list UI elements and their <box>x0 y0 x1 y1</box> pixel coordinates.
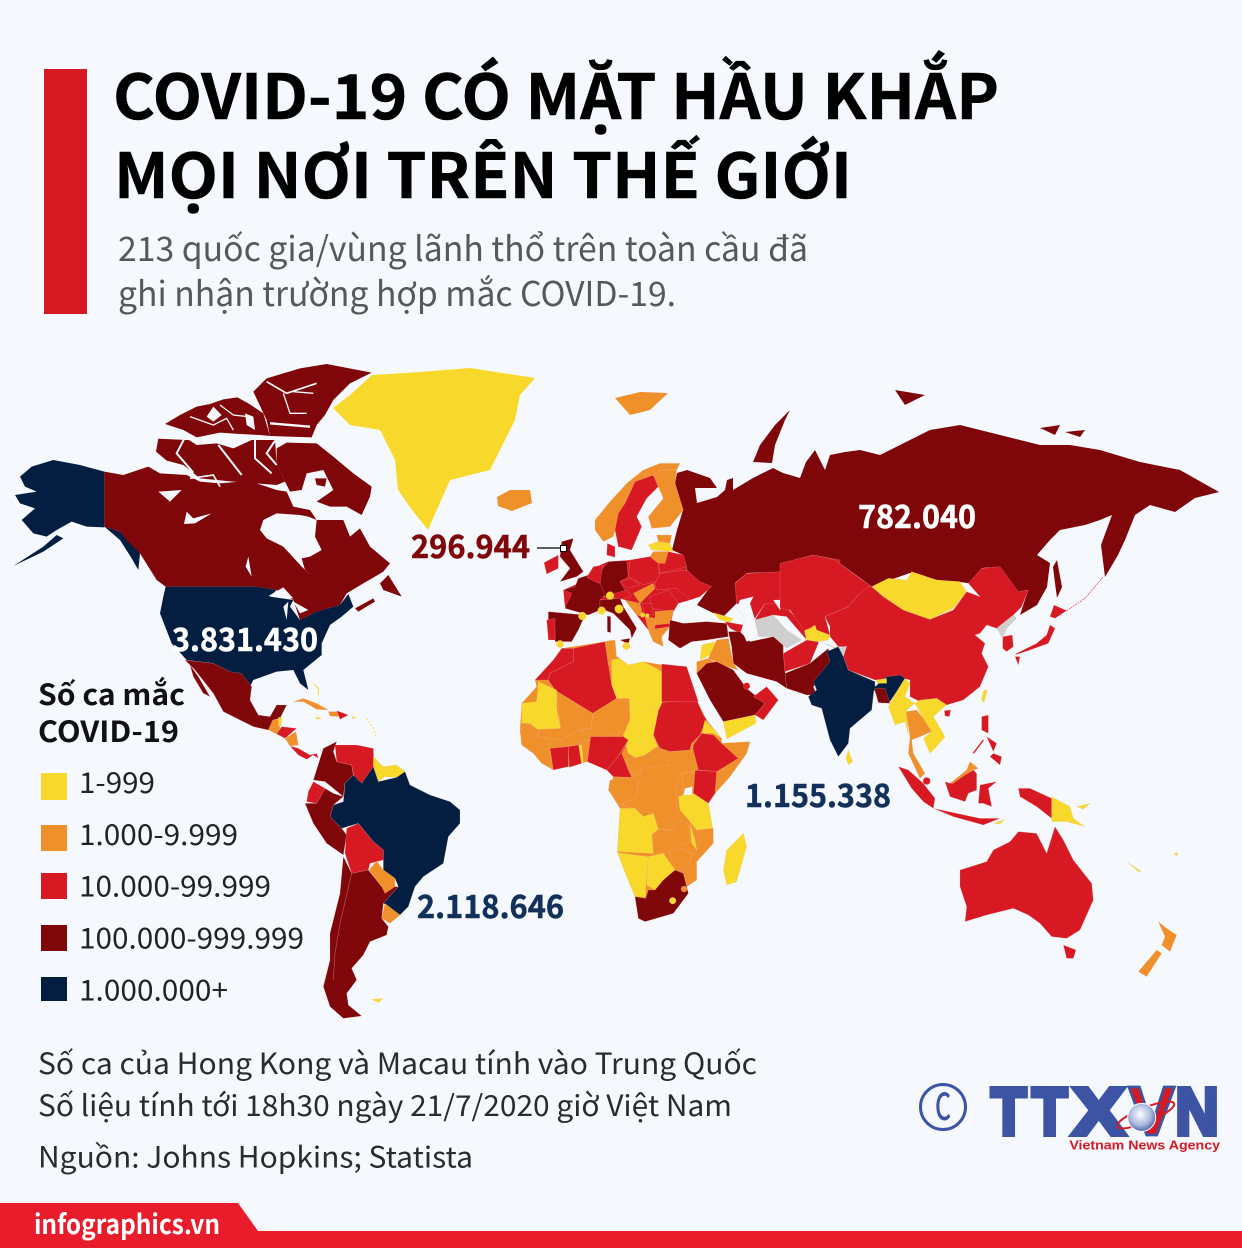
label: UK callout: 296.944 <box>411 522 530 568</box>
map: North America <box>13 364 402 690</box>
logo: TTXVN: X <box>1072 1075 1125 1149</box>
legend heading: COVID-19 <box>38 709 179 751</box>
label: Brazil value: 2.118.646 <box>417 882 564 928</box>
notes and source: Nguồn: Johns Hopkins; Statista <box>38 1134 473 1176</box>
notes and source: Số liệu tính tới 18h30 ngày 21/7/2020 giờ Việt Nam <box>38 1083 732 1125</box>
legend item: 10.000-99.999: 10.000-99.999 <box>79 864 271 906</box>
subtitle: ghi nhận trường hợp mắc COVID-19. <box>118 267 676 316</box>
notes and source: Số ca của Hong Kong và Macau tính vào Trung Quốc <box>38 1041 757 1083</box>
label: USA value: 3.831.430 <box>172 615 318 661</box>
map: Greenland <box>333 368 535 530</box>
legend item: 1.000.000+: 1.000.000+ <box>79 968 228 1010</box>
legend <box>38 672 304 1010</box>
footer band <box>0 1203 1242 1248</box>
logo: TTXVN: V <box>1128 1072 1175 1150</box>
logo: TTXVN: T <box>1032 1075 1067 1149</box>
icon: copyright: C <box>935 1077 951 1131</box>
subtitle <box>118 222 808 316</box>
map: Europe and Middle East <box>544 463 840 739</box>
map: Svalbard <box>615 392 668 415</box>
title: COVID-19 CÓ MẶT HẦU KHẮP <box>113 47 999 137</box>
logo: TTXVN: T <box>991 1075 1026 1149</box>
legend item: 100.000-999.999: 100.000-999.999 <box>79 916 304 958</box>
legend heading <box>38 672 185 751</box>
world map <box>13 364 1219 1018</box>
logo: TTXVN <box>991 1072 1220 1152</box>
map: Iceland <box>497 490 532 511</box>
map: Asia and Oceania <box>780 555 1178 977</box>
label: Russia value: 782.040 <box>858 492 976 538</box>
subtitle: 213 quốc gia/vùng lãnh thổ trên toàn cầu đã <box>118 222 808 271</box>
logo: TTXVN: Vietnam News Agency <box>1069 1138 1220 1152</box>
legend item: 1.000-9.999: 1.000-9.999 <box>79 812 238 854</box>
notes and source <box>38 1041 757 1176</box>
legend item: 1-999: 1-999 <box>79 760 155 802</box>
map: Central and South America <box>185 660 460 1018</box>
legend item: 1-999 <box>41 760 155 802</box>
red accent bar <box>44 69 87 314</box>
label: India value: 1.155.338 <box>745 771 891 817</box>
logo: TTXVN: N <box>1175 1075 1219 1149</box>
legend heading: Số ca mắc <box>38 672 185 714</box>
title: MỌI NƠI TRÊN THẾ GIỚI <box>114 126 852 216</box>
footer band: infographics.vn <box>34 1203 220 1242</box>
icon: copyright <box>920 1077 966 1131</box>
title <box>113 47 999 216</box>
map: Russia <box>672 390 1219 617</box>
map: Africa <box>520 640 750 922</box>
